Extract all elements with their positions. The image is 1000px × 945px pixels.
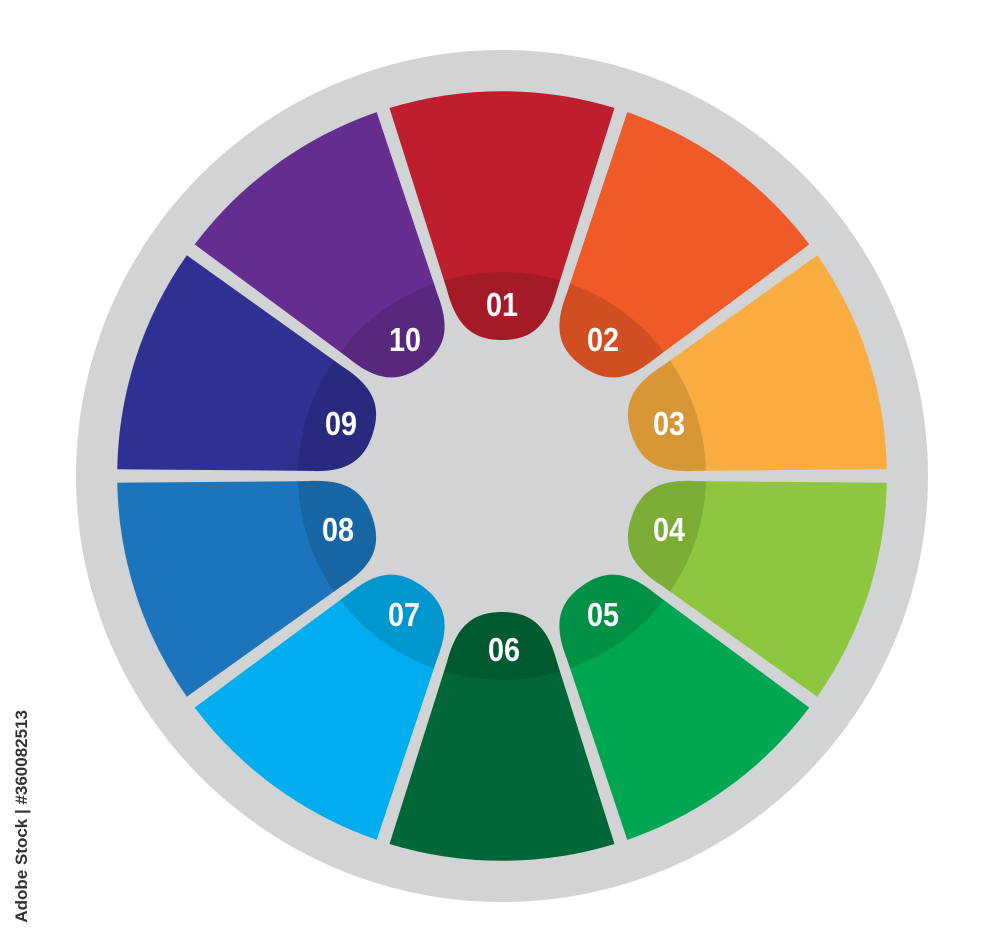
segment 06: [390, 612, 614, 861]
label 06: 06: [488, 631, 520, 668]
label 02: 02: [587, 321, 619, 358]
label 10: 10: [389, 321, 421, 358]
stock id watermark: Adobe Stock | #360082513: [12, 710, 31, 923]
inner shadow on segment tips: [298, 272, 706, 680]
label 07: 07: [388, 596, 420, 633]
label 04: 04: [653, 511, 686, 548]
label 09: 09: [325, 405, 357, 442]
outer gray ring: [76, 50, 928, 902]
segment 02: [491, 99, 819, 432]
segment 04: [597, 411, 903, 702]
label 03: 03: [653, 405, 685, 442]
number labels: [322, 286, 686, 668]
label 05: 05: [587, 596, 619, 633]
segment 10: [185, 99, 513, 432]
label 08: 08: [322, 511, 354, 548]
segment 01: [390, 91, 614, 340]
segment 08: [101, 411, 407, 702]
segment 09: [101, 250, 407, 541]
segment 07: [185, 520, 513, 853]
label 01: 01: [486, 286, 518, 323]
segment 03: [597, 250, 903, 541]
segment 05: [491, 520, 819, 853]
segments wheel: [101, 91, 903, 861]
